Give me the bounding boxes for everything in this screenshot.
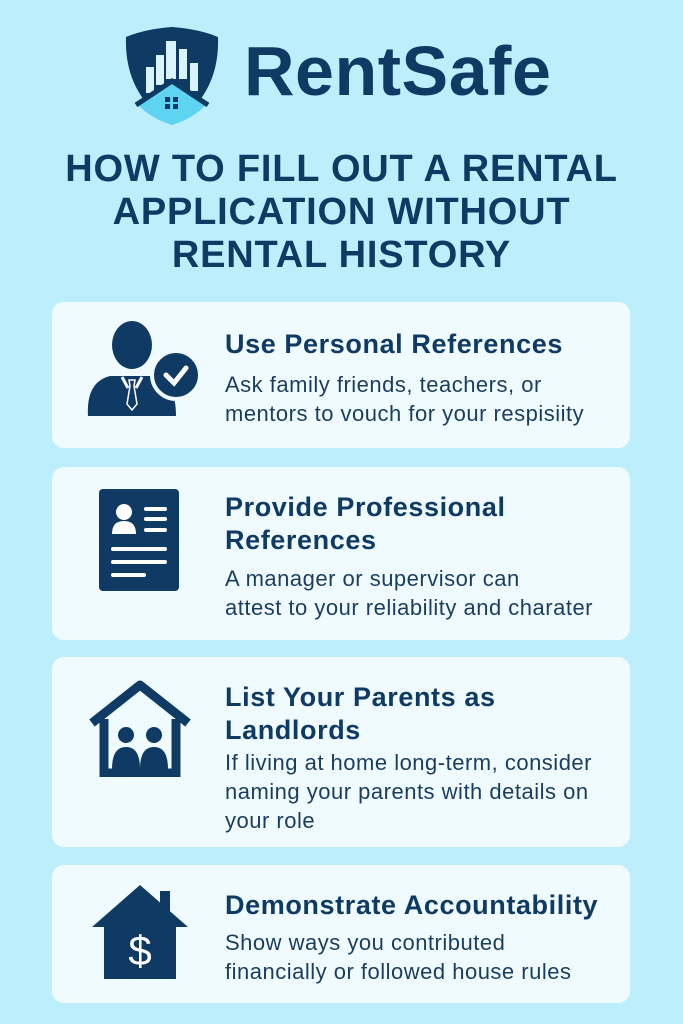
panel: parents as landlords — [52, 657, 630, 847]
panel: professional references: A manager or supervisor can — [225, 566, 520, 591]
panel: parents as landlords: naming your parents with details on — [225, 779, 589, 804]
panel: accountability — [52, 865, 630, 1003]
panel: professional references — [52, 467, 630, 640]
icon: house with dollar — [92, 885, 188, 979]
panel: personal references: Use Personal References — [225, 329, 563, 359]
title — [65, 148, 618, 276]
title: HOW TO FILL OUT A RENTAL — [65, 148, 618, 190]
logo text: RentSafe — [244, 32, 551, 110]
panel: professional references: attest to your reliability and charater — [225, 595, 593, 620]
panel: personal references — [52, 302, 630, 448]
panel: parents as landlords: If living at home long-term, consider — [225, 750, 592, 775]
icon: resume document — [99, 489, 179, 591]
panel: accountability: Demonstrate Accountability — [225, 890, 598, 920]
panel: parents as landlords: List Your Parents as — [225, 682, 496, 712]
logo — [126, 27, 551, 125]
icon: shield — [126, 27, 218, 125]
panel: parents as landlords: your role — [225, 808, 315, 833]
panel: personal references: Ask family friends, teachers, or — [225, 372, 542, 397]
title: APPLICATION WITHOUT — [113, 191, 570, 233]
title: RENTAL HISTORY — [172, 234, 511, 276]
icon: house with dollar: $ — [128, 927, 152, 974]
panel: parents as landlords: Landlords — [225, 715, 361, 745]
panel: personal references: mentors to vouch for your respisiity — [225, 401, 584, 426]
icon: person with check — [88, 321, 198, 416]
panel: professional references: References — [225, 525, 377, 555]
panel: accountability: Show ways you contributed — [225, 930, 505, 955]
panel: accountability: financially or followed house rules — [225, 959, 571, 984]
panel: professional references: Provide Professional — [225, 492, 506, 522]
icon: house with family — [89, 680, 191, 777]
